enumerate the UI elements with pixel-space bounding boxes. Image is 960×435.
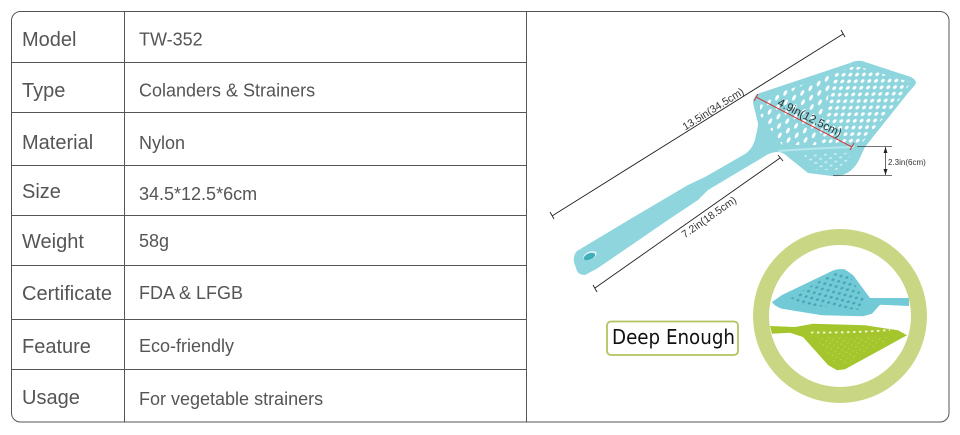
product image: blue strainer scoop	[574, 61, 916, 275]
row: weight	[22, 231, 169, 253]
blue scoop side view	[772, 269, 909, 316]
row: size: 34.5*12.5*6cm	[139, 184, 257, 204]
dimension: handle length	[593, 155, 783, 292]
row: usage: For vegetable strainers	[139, 389, 323, 409]
row: usage: Usage	[22, 387, 80, 409]
row: model: Model	[22, 29, 76, 51]
row: model	[22, 29, 203, 51]
row: feature: Eco-friendly	[139, 336, 234, 356]
green ring	[761, 237, 919, 395]
row: weight: 58g	[139, 231, 169, 251]
green scoop side view	[770, 324, 907, 370]
row: type	[22, 80, 315, 102]
dimension: scoop width: 4.9in(12.5cm)	[775, 97, 844, 140]
row: material	[22, 132, 185, 154]
row: usage	[22, 387, 323, 409]
row: certificate	[22, 283, 243, 305]
row: material: Nylon	[139, 133, 185, 153]
dimension: overall length	[550, 30, 845, 219]
row: material: Material	[22, 132, 93, 154]
handle hole	[582, 249, 598, 262]
row: certificate: FDA & LFGB	[139, 283, 243, 303]
row: feature	[22, 336, 234, 358]
row: certificate: Certificate	[22, 283, 112, 305]
dimension: overall length: 13.5in(34.5cm)	[681, 86, 746, 133]
row: feature: Feature	[22, 336, 91, 358]
inset: side view of scoops	[761, 237, 919, 395]
callout: deep enough: Deep Enough	[612, 325, 735, 349]
callout: deep enough	[607, 322, 738, 355]
row: weight: Weight	[22, 231, 84, 253]
row: type: Type	[22, 80, 65, 102]
dimension: scoop width	[754, 94, 854, 150]
row: size	[22, 181, 257, 204]
row: type: Colanders & Strainers	[139, 80, 315, 100]
dimension: handle length: 7.2in(18.5cm)	[680, 194, 739, 241]
row: model: TW-352	[139, 30, 203, 50]
dimension: scoop depth: 2.3in(6cm)	[888, 158, 926, 167]
dimension: scoop depth	[833, 146, 926, 176]
row: size: Size	[22, 181, 61, 203]
